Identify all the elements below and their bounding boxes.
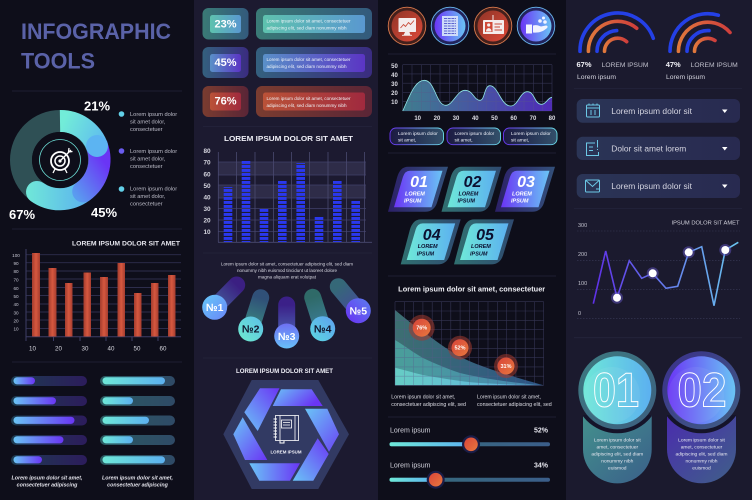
marker 76% [409,315,435,341]
badge card 01: 01 [593,365,639,418]
marker 52%: 52% [454,346,466,352]
area chart notes [390,128,557,145]
layered area chart [395,302,544,385]
slider 34%: 34% [534,462,549,470]
donut legend: consectetuer [130,127,163,133]
area chart notes: Lorem ipsum dolor [398,131,438,137]
icon: checklist [586,140,598,156]
stat row: 76% [202,86,372,117]
donut legend: sit amet dolor, [130,156,166,162]
dropdown: mail: Lorem ipsum dolor sit [611,182,693,191]
bar chart heading: LOREM IPSUM DOLOR SIT AMET [72,240,181,248]
marker 31% [494,354,518,378]
donut percent labels: 45% [91,205,117,220]
tile 05: IPSUM [470,251,488,257]
progress bar captions: Lorem ipsum dolor sit amet, [12,476,83,482]
bar chart: red bars [12,249,181,352]
badge card 01: adipiscing elit, sed diam [591,452,643,458]
tile 03 [495,167,555,212]
tile 02: LOREM [458,191,479,197]
area chart y axis labels: 40 [391,73,398,79]
equalizer y axis labels: 10 [203,229,211,236]
marker 76%: 76% [416,326,427,332]
area chart x axis labels: 70 [530,116,537,122]
line chart y axis labels: 0 [578,311,581,317]
icon: monitor chart [388,7,426,45]
area chart notes: Lorem ipsum dolor [511,131,551,137]
gauge labels: LOREM IPSUM [691,62,738,69]
stat row: 45%: adipiscing elit, sed diam nonummy nibh [266,64,347,70]
donut legend [119,111,177,208]
layered area heading: Lorem ipsum dolor sit amet, consectetuer [398,287,545,294]
gauge labels: LOREM IPSUM [602,62,648,69]
tile 02: IPSUM [458,199,475,205]
bar chart y axis labels: 10 [13,326,19,332]
badge card 02: 02 [678,365,726,418]
stat row: 23%: Lorem ipsum dolor sit amet, consectetuer [266,18,351,24]
area chart x axis labels: 40 [472,116,479,122]
icon: id card [474,7,512,45]
title: INFOGRAPHIC [21,19,171,44]
stat row: 76%: Lorem ipsum dolor sit amet, consectetuer [266,96,351,102]
tile 01 [388,167,448,212]
layered area captions: Lorem ipsum dolor sit amet, [477,394,541,400]
bar chart y axis labels: 70 [13,278,19,282]
bar chart x axis labels [29,346,167,352]
marker 31%: 31% [500,364,512,370]
bar chart y axis labels: 100 [12,253,20,258]
progress bars: purple [11,376,87,465]
icon: document [431,7,469,45]
tile 02 [442,167,502,212]
line chart y axis labels [578,223,587,317]
pill 4 [310,297,335,341]
equalizer y axis labels: 50 [203,183,211,190]
dropdown: mail [577,174,740,198]
layered area captions: consectetuer adipiscing elit, sed [391,402,466,408]
bar chart y axis labels: 30 [13,310,19,316]
area chart x axis labels: 30 [453,116,460,122]
donut legend: consectetuer [130,202,163,208]
donut legend: consectetuer [130,164,163,170]
paragraph [221,262,353,280]
donut legend: Lorem ipsum dolor [130,149,177,155]
bar chart x axis labels: 10 [29,346,36,352]
line chart heading: IPSUM DOLOR SIT AMET [672,220,740,226]
pill 5 [338,287,371,323]
icon: mail [586,180,600,192]
badge card 01: amet, consectetuer [597,445,638,451]
tile 04 [401,219,461,264]
tile 04: IPSUM [417,251,435,257]
area chart y axis labels [391,64,398,106]
tile 05: 05 [476,227,495,244]
slider 52%: 52% [534,428,549,434]
line chart markers [611,244,731,304]
bar chart y axis labels: 40 [13,302,19,307]
badge card 02: Lorem ipsum dolor sit [678,438,726,444]
stat row: 76%: 76% [214,96,237,108]
tile 04: LOREM [418,244,438,250]
bar chart x axis labels: 20 [55,346,62,352]
badge card 02: euismod [692,466,711,472]
gauge labels: Lorem ipsum [577,74,616,81]
stat row: 76%: adipiscing elit, sed diam nonummy nibh [266,103,347,109]
equalizer y axis labels [203,148,211,236]
pill 1: №1 [206,302,224,314]
paragraph: Lorem ipsum dolor sit amet, consectetuer adipiscing elit, sed diam [221,262,353,268]
pill 1 [202,285,237,320]
slider 52%: Lorem ipsum [390,427,431,434]
badge card 01: nonummy nibh [601,459,634,465]
hexagon diagram: LOREM IPSUM [270,450,302,454]
badge card 02: nonummy nibh [685,459,718,465]
icon: target [51,148,72,173]
gauge labels: 47% [666,60,681,69]
area chart y axis labels: 30 [391,82,398,88]
stat row: 23%: adipiscing elit, sed diam nonummy nibh [266,26,347,32]
bar chart x axis labels: 30 [82,346,89,352]
progress bar captions: consectetuer adipiscing [107,482,169,488]
line chart y axis labels: 300 [578,223,587,229]
dropdown: checklist [577,137,740,160]
gauge labels [576,60,738,81]
icon: calendar [586,104,600,117]
equalizer y axis labels: 80 [203,148,211,155]
tile 02: 02 [464,174,482,191]
area chart x axis labels: 10 [414,116,422,122]
stat row: 23%: 23% [214,18,237,30]
equalizer y axis labels: 70 [203,160,211,167]
bar chart y axis labels: 50 [13,294,19,299]
marker 52% [448,336,472,360]
area chart [391,64,556,122]
badge card 01: Lorem ipsum dolor sit [594,438,641,444]
pill 4: №4 [314,324,332,336]
bar chart y axis labels: 20 [13,318,19,324]
hexagon diagram [223,380,349,489]
tile 03: LOREM [512,191,532,197]
line chart [577,220,740,318]
slider 34% [390,462,550,489]
area chart x axis labels [414,116,556,122]
pill 2: №2 [242,324,260,336]
badge card 02: adipiscing elit, sed diam [676,452,727,458]
line chart y axis labels: 100 [578,281,587,287]
gauge labels: 67% [576,60,592,69]
stat row: 45%: 45% [214,57,237,69]
title [21,19,171,74]
tile 04: 04 [423,227,441,244]
area chart notes: Lorem ipsum dolor [454,131,495,137]
bar chart x axis labels: 40 [108,346,115,352]
bar chart y axis labels: 60 [13,286,19,291]
area chart notes: sit amet, [454,138,473,144]
stat row: 45%: Lorem ipsum dolor sit amet, consectetuer [266,57,351,63]
area chart notes: sit amet, [511,138,529,144]
dropdown: checklist: Dolor sit amet lorem [611,144,687,154]
progress bar captions [12,476,173,488]
donut percent labels [9,98,117,222]
gauge labels: Lorem ipsum [666,74,705,81]
tile 05 [454,219,514,264]
slider 52% [390,427,550,453]
dropdown: calendar [577,99,740,123]
progress bar captions: Lorem ipsum dolor sit amet, [102,476,173,482]
layered area captions: Lorem ipsum dolor sit amet, [391,394,455,400]
badge card 01: euismod [608,466,627,472]
bar chart x axis labels: 60 [160,346,167,352]
equalizer chart heading: LOREM IPSUM DOLOR SIT AMET [224,134,353,143]
bar chart y axis labels [12,253,20,332]
equalizer bar chart [203,148,372,242]
equalizer y axis labels: 30 [203,206,211,213]
tile 05: LOREM [471,244,491,250]
area chart y axis labels: 20 [391,91,398,97]
stat row: 23% [202,8,372,40]
area chart y axis labels: 10 [391,100,398,106]
progress bars: teal [100,376,175,465]
donut percent labels: 21% [84,98,110,114]
area chart x axis labels: 20 [434,116,441,122]
pill 5: №5 [350,306,367,318]
equalizer y axis labels: 40 [203,194,211,201]
donut legend: sit amet dolor, [130,120,166,126]
bar chart y axis labels: 80 [13,269,19,274]
area chart notes: sit amet, [398,138,416,144]
badge card 02: amet, consectetuer [681,445,723,451]
stat row: 45% [202,47,372,78]
dropdown: calendar: Lorem ipsum dolor sit [611,107,693,116]
pill 3: №3 [278,331,296,343]
badge card 02 [662,351,740,484]
tile 03: IPSUM [511,199,529,205]
bar chart x axis labels: 50 [134,346,141,352]
icon: hand with bubbles [517,7,555,45]
slider 34%: Lorem ipsum [390,462,431,470]
area chart y axis labels: 50 [391,64,398,70]
line chart y axis labels: 200 [578,252,587,258]
layered area captions [391,394,552,408]
pill 2 [238,298,263,342]
donut legend: Lorem ipsum dolor [130,186,177,192]
area chart x axis labels: 60 [510,116,518,122]
tile 01: LOREM [405,191,425,197]
layered area captions: consectetuer adipiscing elit, sed [477,402,552,408]
hexagon heading: LOREM IPSUM DOLOR SIT AMET [236,368,333,375]
pill 3 [274,305,299,348]
title: TOOLS [21,48,95,74]
equalizer y axis labels: 20 [203,217,211,224]
paragraph: magna aliquam erat volutpat [258,274,317,280]
equalizer y axis labels: 60 [203,171,211,178]
area chart x axis labels: 50 [491,116,498,122]
arc gauge 47% [670,14,730,51]
donut legend: Lorem ipsum dolor [130,112,177,118]
donut chart [21,121,108,199]
tile 01: IPSUM [404,199,422,205]
donut percent labels: 67% [9,207,35,222]
badge card 01 [578,351,656,484]
arc gauge 67% [580,13,653,51]
tile 01: 01 [410,174,428,191]
area chart x axis labels: 80 [549,116,556,122]
donut legend: sit amet dolor, [130,194,166,200]
paragraph: nonummy nibh euismod tincidunt ut laoreet dolore [237,268,337,274]
icon: notebook [274,416,298,443]
progress bar captions: consectetuer adipiscing [17,482,78,488]
bar chart y axis labels: 90 [13,261,19,266]
tile 03: 03 [517,174,535,191]
numbered pills [202,285,371,348]
